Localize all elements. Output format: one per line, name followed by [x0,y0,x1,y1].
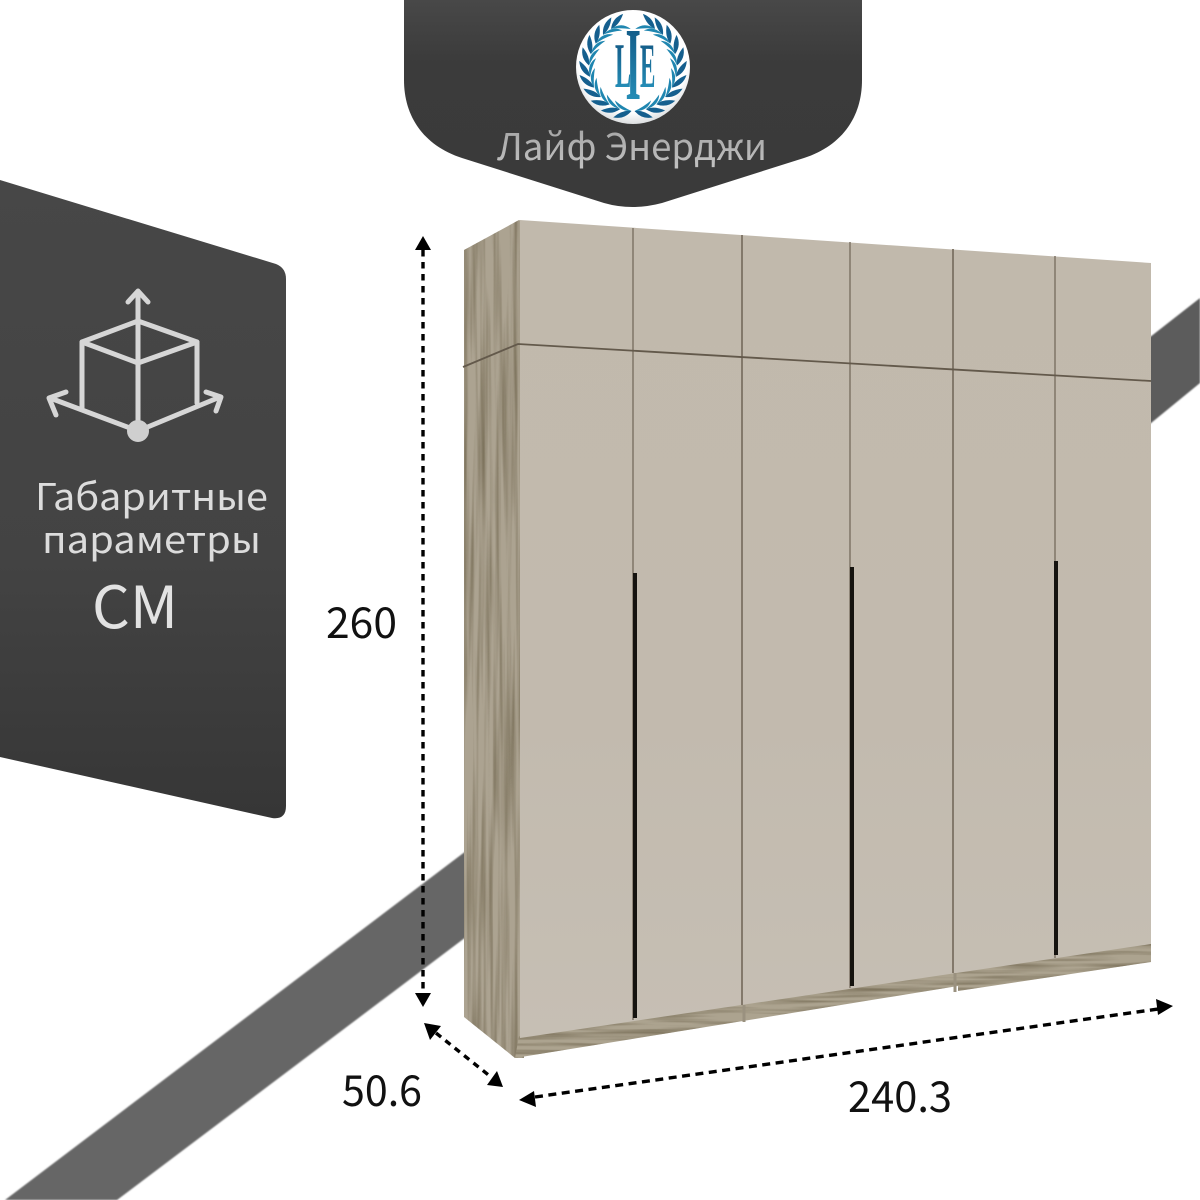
header tab [404,0,862,207]
wardrobe doors [520,220,1151,1038]
diagonal band: lower left [5,848,470,1200]
plinth joints [744,973,955,1022]
wardrobe plinth [515,942,1151,1058]
wardrobe [463,220,1151,1058]
brand name: Лайф Энерджи [497,117,767,171]
logo: L [615,31,631,102]
dimension: width value: 240.3 [848,1063,952,1125]
diagonal band: upper right [1145,298,1200,428]
dimension: depth value: 50.6 [342,1057,422,1119]
door seams [633,228,1055,1020]
dimension: width arrow [519,999,1173,1107]
icon: cube with axes [49,291,221,440]
panel heading: параметры [42,510,261,564]
panel heading: Габаритные [35,467,268,521]
dimension: depth arrow [424,1023,503,1087]
logo [576,8,690,124]
logo: E [640,31,655,102]
left info panel [0,180,286,818]
header shape [404,0,862,207]
door handles [633,561,1058,1018]
dimension: height value: 260 [326,589,397,651]
dimension: height arrow [415,236,431,1007]
logo: I [626,8,641,123]
unit label: СМ [92,561,178,645]
panel shape [0,180,286,818]
mezzanine seam [463,344,1151,381]
wardrobe side [464,220,524,1058]
panel heading [35,467,268,564]
